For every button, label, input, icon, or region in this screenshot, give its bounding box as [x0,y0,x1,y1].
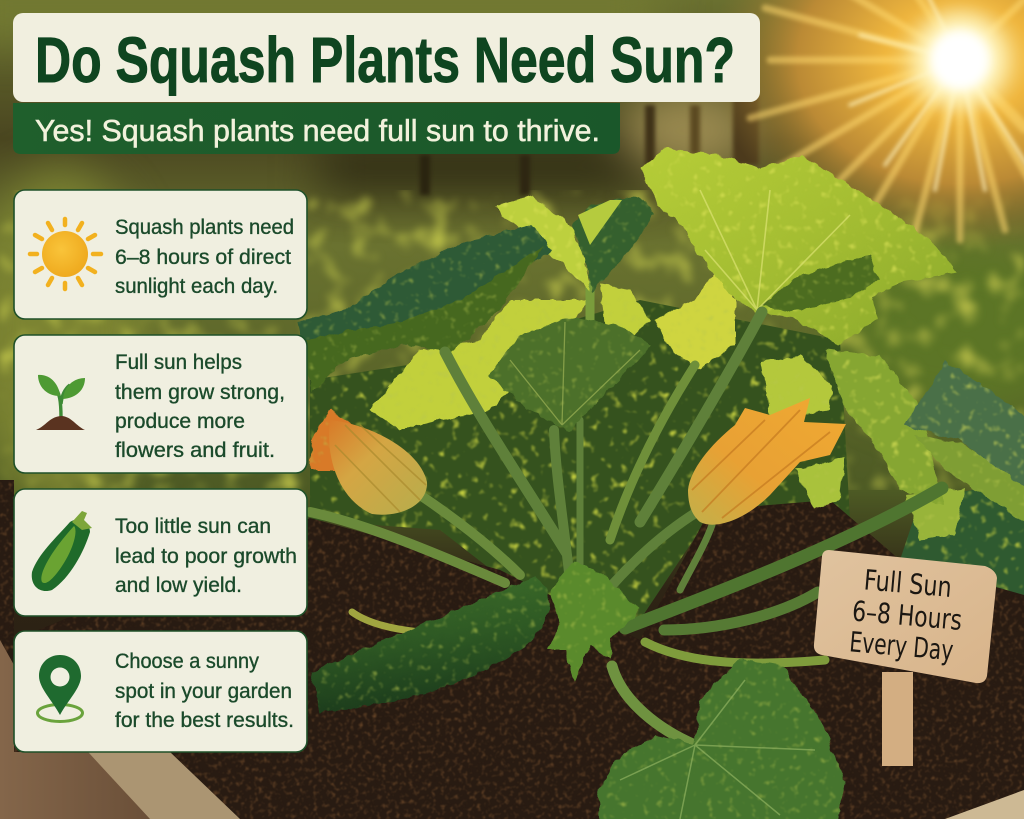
foliage bokeh: left and right hedges [0,190,1024,490]
text: sunlight hours: 6–8 hours of direct [115,245,291,269]
foliage mass behind the plant [310,300,1024,620]
text: choose a spot: spot in your garden [115,679,292,703]
icon: location pin [38,655,82,722]
text: poor growth [115,514,297,597]
left dark leaf [298,225,552,392]
text: benefits [115,350,285,462]
wooden sign: Full Sun 6-8 Hours Every Day [814,550,997,766]
text: choose a spot: for the best results. [115,708,294,732]
large sunlit leaf, top [640,148,957,345]
icon: sun [30,219,101,289]
subtitle band [13,103,620,154]
sun with glowing rays [710,0,1024,250]
large leaf, bottom [598,658,845,819]
zucchini fruit [310,576,549,712]
panel: too little sun [14,489,307,616]
title panel [13,13,760,102]
squash blossom, left [310,408,427,515]
text: sunlight hours [115,215,294,298]
text: choose a spot: Choose a sunny [115,649,259,673]
text: benefits: produce more [115,409,245,433]
text: choose a spot [115,649,294,732]
raised bed soil [0,480,1024,819]
text: sunlight hours: Squash plants need [115,215,294,239]
wooden sign: Full Sun 6-8 Hours Every Day: 6–8 Hours [851,594,963,637]
squash blossom, right [688,398,846,525]
pale sunlit leaves behind [370,265,965,540]
main stems, front [310,312,942,745]
panel: grow strong [14,335,307,473]
wooden sign: Full Sun 6-8 Hours Every Day: Full Sun [863,563,953,604]
panel: direct sunlight [14,190,307,319]
subtitle band: Yes! Squash plants need full sun to thrive. [35,114,600,148]
text: benefits: Full sun helps [115,350,242,374]
centre leaf [488,316,652,432]
icon: seedling [36,375,85,430]
icon: zucchini [32,511,92,591]
right leaves [825,350,1024,525]
text: benefits: them grow strong, [115,380,285,404]
squash plant stems, rear [352,285,712,632]
text: benefits: flowers and fruit. [115,438,275,462]
plant crown [548,560,640,682]
text: poor growth: lead to poor growth [115,544,297,568]
text: poor growth: Too little sun can [115,514,271,538]
text: poor growth: and low yield. [115,573,242,597]
title panel: Do Squash Plants Need Sun? [35,24,735,96]
wooden sign: Full Sun 6-8 Hours Every Day: Every Day [848,625,955,667]
panel: sunny spot [14,631,307,752]
raised bed wooden frame [0,640,1024,819]
second leaf, upper centre [495,195,655,292]
text: sunlight hours: sunlight each day. [115,274,278,298]
